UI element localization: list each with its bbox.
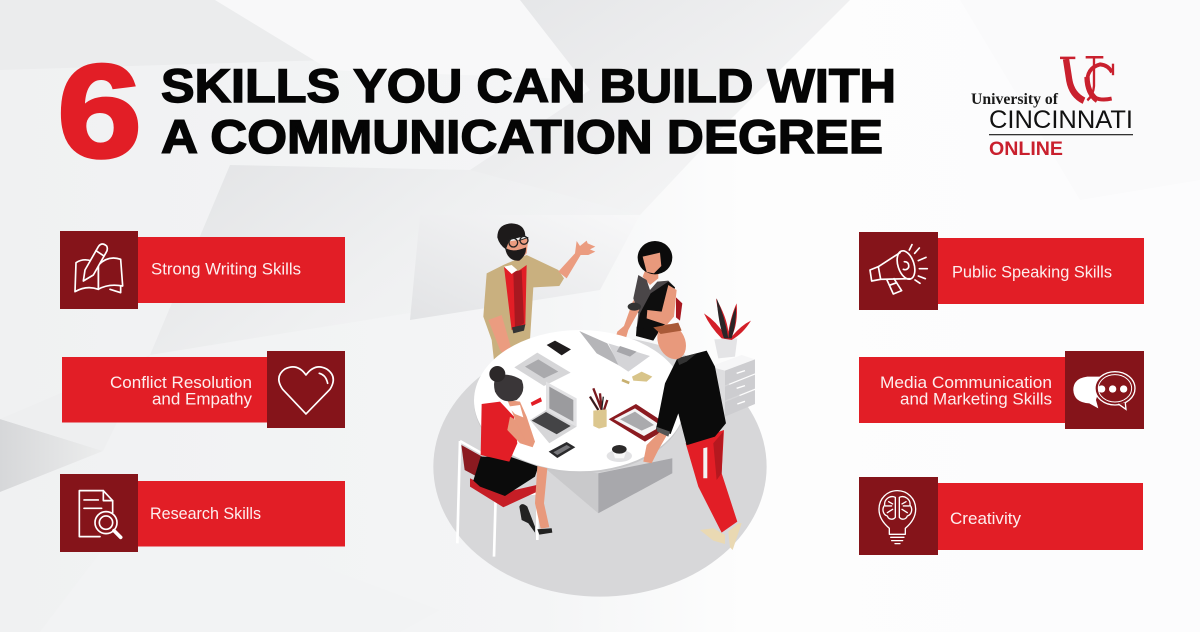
tablet [609, 404, 671, 442]
standing woman in black top [615, 241, 682, 342]
logo text: University of [971, 91, 1059, 108]
skill: Creativity: Creativity [950, 509, 1021, 528]
sticky notes and pen [622, 372, 652, 383]
skill: Strong Writing Skills: Strong Writing Skills [151, 260, 301, 278]
laptop at back [579, 331, 650, 372]
cabinet [710, 355, 755, 417]
phones [547, 341, 575, 458]
logo: University of Cincinnati Online: CINCINNATI [989, 106, 1133, 134]
table base [543, 467, 598, 513]
pencil cup [590, 388, 607, 429]
logo mark UC [1060, 57, 1113, 101]
coffee cup [607, 445, 632, 462]
table top [474, 330, 686, 473]
floor circle [433, 337, 767, 597]
icon: book and pen [75, 244, 123, 293]
skill: Creativity [859, 477, 1143, 555]
plant [704, 298, 751, 358]
skill: Research Skills: Research Skills [150, 504, 261, 523]
icon: megaphone [870, 245, 927, 294]
logo: University of Cincinnati Online [971, 57, 1133, 160]
icon: speech bubbles [1073, 372, 1135, 409]
icon: brain light bulb [879, 491, 916, 544]
skill: Media Communication and Marketing Skills: and Marketing Skills [900, 390, 1052, 408]
notebook [514, 353, 571, 386]
leaning man in black and red [643, 319, 742, 550]
skill: Conflict Resolution and Empathy [62, 351, 345, 428]
skill: Strong Writing Skills [60, 231, 345, 309]
title: A COMMUNICATION DEGREE [161, 110, 883, 163]
seated woman in red with chair [457, 366, 552, 557]
skill: Media Communication and Marketing Skills [859, 351, 1144, 429]
illustration: people meeting around a table [433, 223, 767, 597]
skill: Public Speaking Skills: Public Speaking Skills [952, 262, 1112, 282]
skill: Media Communication and Marketing Skills: Media Communication [880, 373, 1052, 392]
skill: Conflict Resolution and Empathy: and Empathy [152, 390, 252, 408]
skill: Conflict Resolution and Empathy: Conflict Resolution [110, 373, 252, 392]
skill: Public Speaking Skills [859, 232, 1144, 310]
standing man in tan jacket [483, 223, 595, 361]
big number 6: 6 [57, 38, 142, 186]
title: SKILLS YOU CAN BUILD WITH [161, 59, 896, 112]
icon: heart [279, 367, 333, 414]
title [161, 59, 896, 163]
icon: document and magnifier [79, 491, 121, 537]
skill: Research Skills [60, 474, 345, 552]
logo: University of Cincinnati Online: ONLINE [989, 138, 1063, 160]
front laptop [530, 382, 577, 443]
